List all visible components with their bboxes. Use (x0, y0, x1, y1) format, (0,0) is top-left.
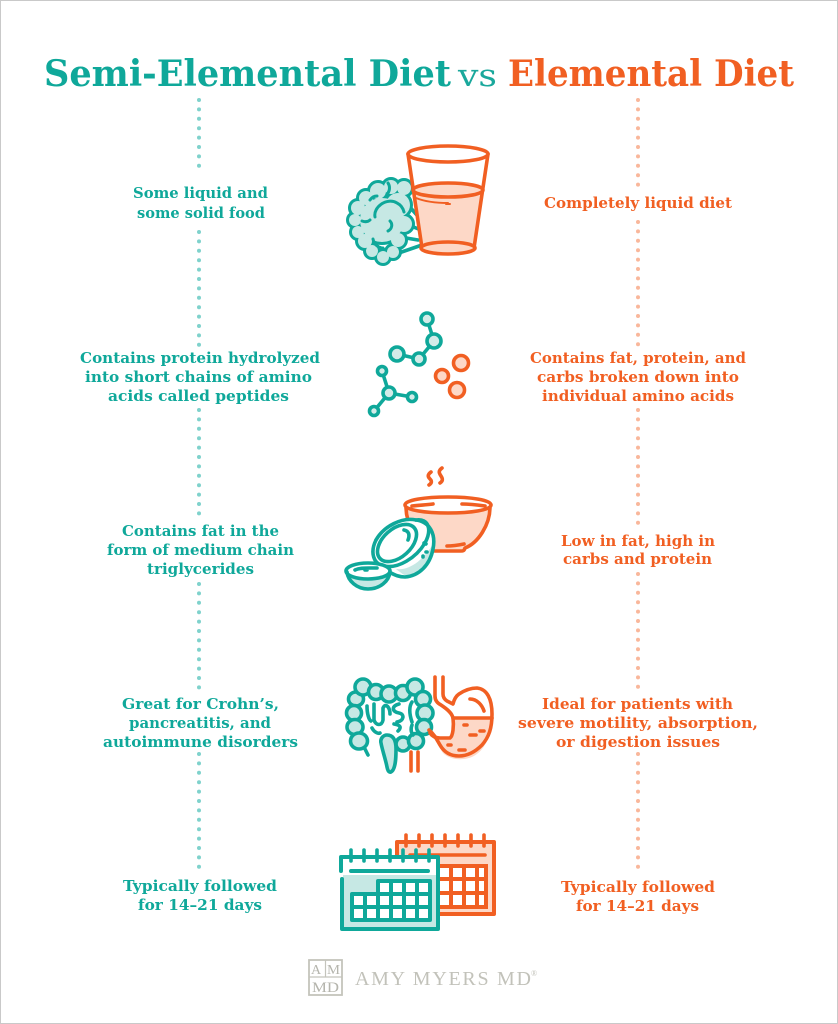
text: semi-elemental liquid and solid food (133, 184, 268, 222)
icon: calendars (341, 835, 494, 929)
text: elemental duration (561, 878, 716, 915)
text: elemental conditions: severe motility, absorption, (518, 714, 758, 732)
icon: broccoli and glass of liquid (349, 146, 488, 263)
title: Semi-Elemental Diet (44, 53, 451, 95)
text: elemental conditions: or digestion issues (556, 733, 720, 751)
text: elemental fat protein carbs: Contains fat, protein, and (530, 349, 747, 367)
icon: coconut (346, 517, 434, 589)
icon: intestines and stomach (346, 677, 492, 772)
text: elemental conditions: Ideal for patients with (542, 695, 733, 713)
text: semi-elemental fat: triglycerides (147, 560, 254, 578)
logo: Amy Myers MD: AMY MYERS MD (355, 968, 531, 990)
icon: glass (408, 146, 488, 254)
text: semi-elemental fat: form of medium chain (107, 541, 294, 559)
icon: broccoli (349, 180, 424, 263)
text: elemental conditions (518, 695, 758, 751)
title (44, 53, 794, 95)
logo: Amy Myers MD: MD (312, 980, 339, 996)
text: elemental fat protein carbs: carbs broken down into (537, 368, 739, 386)
text: elemental low fat: Low in fat, high in (561, 532, 715, 550)
logo: Amy Myers MD: A (311, 963, 322, 978)
text: semi-elemental duration (123, 877, 278, 914)
text: elemental low fat (561, 532, 715, 568)
text: semi-elemental conditions: pancreatitis, and (129, 714, 272, 732)
icon: intestines (346, 679, 433, 772)
text: elemental duration: for 14–21 days (576, 897, 699, 915)
logo: Amy Myers MD: M (327, 963, 341, 978)
logo: Amy Myers MD (309, 960, 537, 996)
title: vs (457, 58, 497, 94)
icon: amino acid molecules (370, 313, 468, 416)
text: semi-elemental fat (107, 522, 294, 578)
icon: orange calendar (397, 835, 494, 914)
text: semi-elemental conditions (103, 695, 298, 751)
text: elemental duration: Typically followed (561, 878, 716, 896)
logo: Amy Myers MD: ® (531, 969, 537, 978)
icon: stomach (429, 677, 492, 759)
text: semi-elemental protein: Contains protein hydrolyzed (80, 349, 321, 367)
text: semi-elemental protein: acids called peptides (108, 387, 289, 405)
icon: bowl (405, 468, 491, 551)
text: semi-elemental duration: Typically followed (123, 877, 278, 895)
text: semi-elemental conditions: autoimmune disorders (103, 733, 298, 751)
text: semi-elemental protein: into short chains of amino (85, 368, 312, 386)
text: semi-elemental protein (80, 349, 321, 405)
title: Elemental Diet (508, 53, 794, 95)
text: semi-elemental fat: Contains fat in the (122, 522, 279, 540)
icon: teal calendar (341, 850, 438, 929)
text: semi-elemental liquid and solid food: Some liquid and (133, 184, 268, 202)
text: elemental completely liquid: Completely liquid diet (544, 194, 732, 212)
text: elemental fat protein carbs (530, 349, 747, 405)
text: elemental fat protein carbs: individual amino acids (542, 387, 734, 405)
text: semi-elemental liquid and solid food: some solid food (137, 204, 265, 222)
text: semi-elemental conditions: Great for Crohn’s, (122, 695, 279, 713)
text: semi-elemental duration: for 14–21 days (138, 896, 262, 914)
icon: coconut and bowl (346, 468, 491, 589)
text: elemental low fat: carbs and protein (563, 550, 712, 568)
